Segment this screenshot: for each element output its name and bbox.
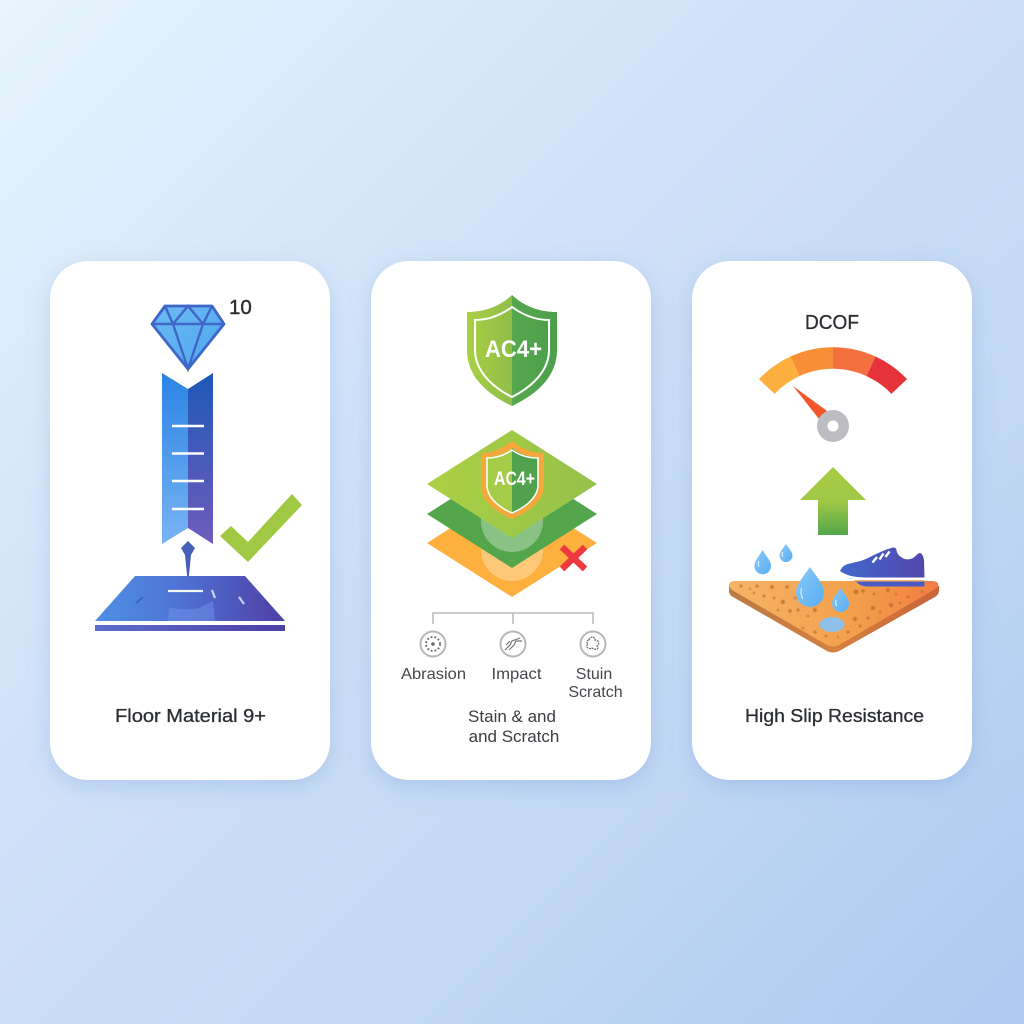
bottom layer [427,489,597,597]
label: stuin scratch: Stuin [576,666,612,683]
caption: and Scratch [469,727,559,746]
textured floor surface [729,581,939,652]
icon: AC4+ shield [467,295,557,406]
icon: stain scratch [580,632,606,656]
caption: High Slip Resistance [745,706,924,726]
caption: Floor Material 9+ [115,706,266,726]
icon: red cross [562,547,585,569]
icon: water drops [754,544,849,632]
icon: diamond [152,306,224,369]
card background [692,261,972,780]
hardness value: 10 [229,296,252,319]
connector tree [433,613,593,624]
icon: abrasion [420,632,446,656]
card background [50,261,330,780]
DCOF heading: DCOF [805,312,859,334]
panel: slip resistance [692,261,972,780]
caption: Stain & and [468,707,556,726]
small shield [481,441,544,519]
panel: floor material hardness [50,261,330,780]
layer stack [427,430,597,597]
icon: AC4+ shield: AC4+ [485,336,542,363]
scratch tip [181,541,195,585]
gauge needle [793,386,849,442]
card background [371,261,651,780]
panel: AC4+ wear rating [371,261,651,780]
icon: shoe [840,548,924,586]
label: impact: Impact [492,666,542,683]
icon: check mark [220,494,302,562]
middle layer [427,460,597,568]
label: stuin scratch: Scratch [568,684,623,701]
icon: impact [500,632,526,656]
hardness scale ruler [162,373,213,544]
floor slab [95,576,285,631]
gauge arc [767,358,899,386]
top layer [427,430,597,538]
small shield: AC4+ [494,469,535,490]
up arrow [800,467,866,535]
label: abrasion: Abrasion [401,666,466,683]
